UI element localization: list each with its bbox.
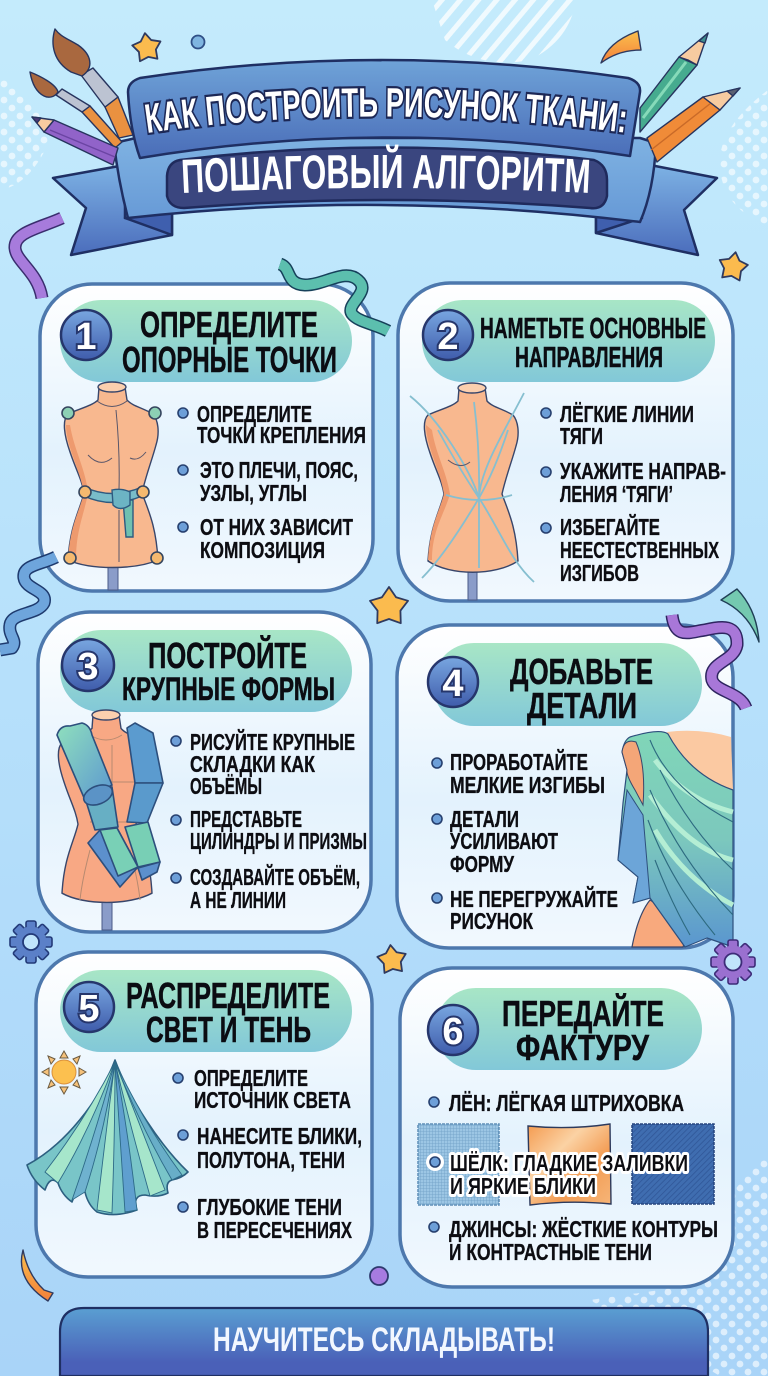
- star lower: [376, 944, 407, 974]
- upper banner: [128, 60, 640, 158]
- footer text: НАУЧИТЕСЬ СКЛАДЫВАТЬ!: [213, 1321, 555, 1359]
- draped fabric on shoulder: [618, 731, 733, 947]
- anchor points: [62, 407, 163, 564]
- step 1 bullets: ОПРЕДЕЛИТЕ: [197, 401, 312, 427]
- ribbon tail left: [53, 165, 172, 255]
- step 6 heading: ФАКТУРУ: [516, 1027, 649, 1068]
- panel: step 4: [397, 625, 733, 948]
- step 2 bullets: ЛЁГКИЕ ЛИНИИ: [560, 401, 694, 427]
- step 5 bullets: В ПЕРЕСЕЧЕНИЯХ: [197, 1217, 352, 1243]
- mannequin with volumes: [57, 710, 163, 930]
- step 4 heading: ДЕТАЛИ: [527, 685, 637, 726]
- halftone dots: top left: [0, 75, 50, 190]
- purple ribbon left: [15, 218, 62, 298]
- step 1 heading: [60, 300, 352, 382]
- blue ribbon left: [0, 557, 56, 650]
- step 1 heading: 1: [75, 316, 97, 358]
- step 4 bullets: НЕ ПЕРЕГРУЖАЙТЕ: [450, 885, 618, 912]
- belt and knot: [84, 487, 142, 537]
- step 6 bullets: [426, 1090, 718, 1265]
- star top left: [131, 31, 163, 62]
- middle ribbon: [114, 138, 656, 222]
- step 2 bullets: ЛЕНИЯ ‘ТЯГИ’: [560, 481, 673, 507]
- step 6 heading: 6: [442, 1011, 464, 1053]
- draped cone fabric: [27, 1060, 188, 1215]
- step 2 heading: [422, 300, 715, 382]
- step 6 bullets: ЛЁН: ЛЁГКАЯ ШТРИХОВКА: [449, 1090, 684, 1116]
- step 5 bullets: ГЛУБОКИЕ ТЕНИ: [197, 1194, 342, 1220]
- step 2 bullets: [541, 401, 726, 586]
- mannequin with anchor points: [62, 382, 163, 590]
- step 3 bullets: РИСУЙТЕ КРУПНЫЕ: [190, 728, 355, 755]
- step 5 bullets: [173, 1065, 362, 1243]
- fabric folds: [648, 740, 733, 935]
- step 3 bullets: СКЛАДКИ КАК: [190, 751, 316, 777]
- icon: green pencil: [640, 33, 708, 132]
- panel: step 5: [27, 952, 372, 1277]
- step 2 bullets: ИЗГИБОВ: [560, 560, 639, 586]
- step 3 bullets: ОБЪЁМЫ: [190, 773, 262, 799]
- footer banner: [60, 1308, 708, 1376]
- step 3 bullets: А НЕ ЛИНИИ: [190, 887, 286, 913]
- step 6 bullets: И ЯРКИЕ БЛИКИ: [450, 1173, 596, 1199]
- ribbon tail right: [596, 165, 717, 255]
- step 5 heading: РАСПРЕДЕЛИТЕ: [126, 975, 330, 1016]
- step 5 heading: 5: [78, 988, 100, 1030]
- step 6 heading: [428, 988, 702, 1070]
- step 1 bullets: УЗЛЫ, УГЛЫ: [200, 480, 307, 506]
- tension lines: [410, 393, 534, 582]
- purple ribbon right: [672, 615, 746, 708]
- panel: step 1: [40, 284, 373, 591]
- icon: purple pencil: [32, 117, 118, 165]
- step 4 bullets: ПРОРАБОТАЙТЕ: [450, 748, 588, 775]
- step 1 bullets: ОТ НИХ ЗАВИСИТ: [200, 514, 353, 540]
- step 2 heading: НАПРАВЛЕНИЯ: [515, 342, 663, 374]
- icon: sun: [42, 1051, 86, 1094]
- step 6 bullets: ШЁЛК: ГЛАДКИЕ ЗАЛИВКИ: [450, 1150, 688, 1176]
- step 2 bullets: ИЗБЕГАЙТЕ: [560, 513, 660, 540]
- step 4 bullets: РИСУНОК: [450, 908, 534, 934]
- swatch: linen: [418, 1124, 499, 1205]
- step 3 heading: КРУПНЫЕ ФОРМЫ: [122, 671, 335, 707]
- purple dot: [370, 1267, 388, 1285]
- step 6 bullets: И КОНТРАСТНЫЕ ТЕНИ: [449, 1239, 652, 1265]
- volumes: [57, 723, 163, 887]
- panel: step 3: [38, 612, 371, 932]
- step 5 bullets: ИСТОЧНИК СВЕТА: [194, 1087, 351, 1113]
- step 3 heading: 3: [77, 646, 99, 688]
- swatch: denim: [632, 1124, 714, 1204]
- icon: brush small: [30, 72, 122, 148]
- diagonal stripes: [432, 0, 576, 62]
- step 1 bullets: [178, 401, 366, 563]
- halftone dots: bottom right: [590, 1150, 768, 1376]
- step 5 heading: СВЕТ И ТЕНЬ: [146, 1009, 311, 1050]
- swatch: silk: [528, 1124, 611, 1205]
- header banner: [29, 28, 741, 256]
- step 3 heading: ПОСТРОЙТЕ: [148, 634, 307, 676]
- step 5 bullets: ПОЛУТОНА, ТЕНИ: [197, 1147, 345, 1173]
- panel: step 6: [400, 968, 733, 1287]
- step 1 bullets: ЭТО ПЛЕЧИ, ПОЯС,: [200, 457, 358, 483]
- step 4 heading: ДОБАВЬТЕ: [510, 651, 653, 692]
- teal ribbon top: [280, 264, 388, 331]
- brushes and pencil left: [30, 29, 133, 165]
- step 5 bullets: НАНЕСИТЕ БЛИКИ,: [197, 1123, 362, 1149]
- panel: step 2: [398, 283, 733, 601]
- icon: gear purple: [711, 940, 755, 984]
- teal swoosh right: [721, 589, 759, 642]
- dot top: [192, 36, 204, 48]
- halftone dots: right: [720, 90, 768, 225]
- orange swoosh: [601, 31, 641, 63]
- icon: gear blue: [10, 921, 52, 963]
- mannequin with tension lines: [410, 383, 534, 600]
- step 3 bullets: ЦИЛИНДРЫ И ПРИЗМЫ: [190, 828, 367, 854]
- step 4 bullets: УСИЛИВАЮТ: [450, 828, 558, 854]
- step 4 bullets: ФОРМУ: [450, 851, 515, 877]
- dark lower banner: [167, 148, 607, 208]
- star right: [717, 250, 750, 281]
- step 3 heading: [60, 630, 352, 712]
- title line 1: КАК ПОСТРОИТЬ РИСУНОК ТКАНИ:: [143, 86, 628, 136]
- step 3 bullets: ПРЕДСТАВЬТЕ: [190, 806, 302, 832]
- step 1 bullets: КОМПОЗИЦИЯ: [200, 537, 325, 563]
- step 1 bullets: ТОЧКИ КРЕПЛЕНИЯ: [197, 422, 366, 448]
- icon: orange pencil: [647, 88, 740, 162]
- step 3 bullets: [171, 728, 367, 913]
- step 5 heading: [60, 970, 352, 1052]
- icon: brush large: [53, 29, 133, 138]
- star centre: [370, 587, 408, 623]
- folds: [45, 1062, 182, 1213]
- step 4 heading: 4: [442, 663, 464, 705]
- step 4 bullets: ДЕТАЛИ: [450, 806, 519, 832]
- step 4 bullets: МЕЛКИЕ ИЗГИБЫ: [450, 772, 605, 798]
- step 1 heading: ОПРЕДЕЛИТЕ: [140, 304, 318, 345]
- step 2 bullets: ТЯГИ: [560, 423, 603, 449]
- step 3 bullets: СОЗДАВАЙТЕ ОБЪЁМ,: [190, 863, 360, 890]
- step 6 heading: ПЕРЕДАЙТЕ: [502, 992, 664, 1034]
- orange crescent: [21, 1250, 53, 1301]
- step 4 heading: [428, 643, 702, 726]
- title line 2: ПОШАГОВЫЙ АЛГОРИТМ: [182, 144, 590, 193]
- step 5 bullets: ОПРЕДЕЛИТЕ: [194, 1065, 308, 1091]
- step 1 heading: ОПОРНЫЕ ТОЧКИ: [122, 339, 337, 380]
- step 2 heading: 2: [437, 316, 459, 358]
- step 4 bullets: [432, 748, 618, 934]
